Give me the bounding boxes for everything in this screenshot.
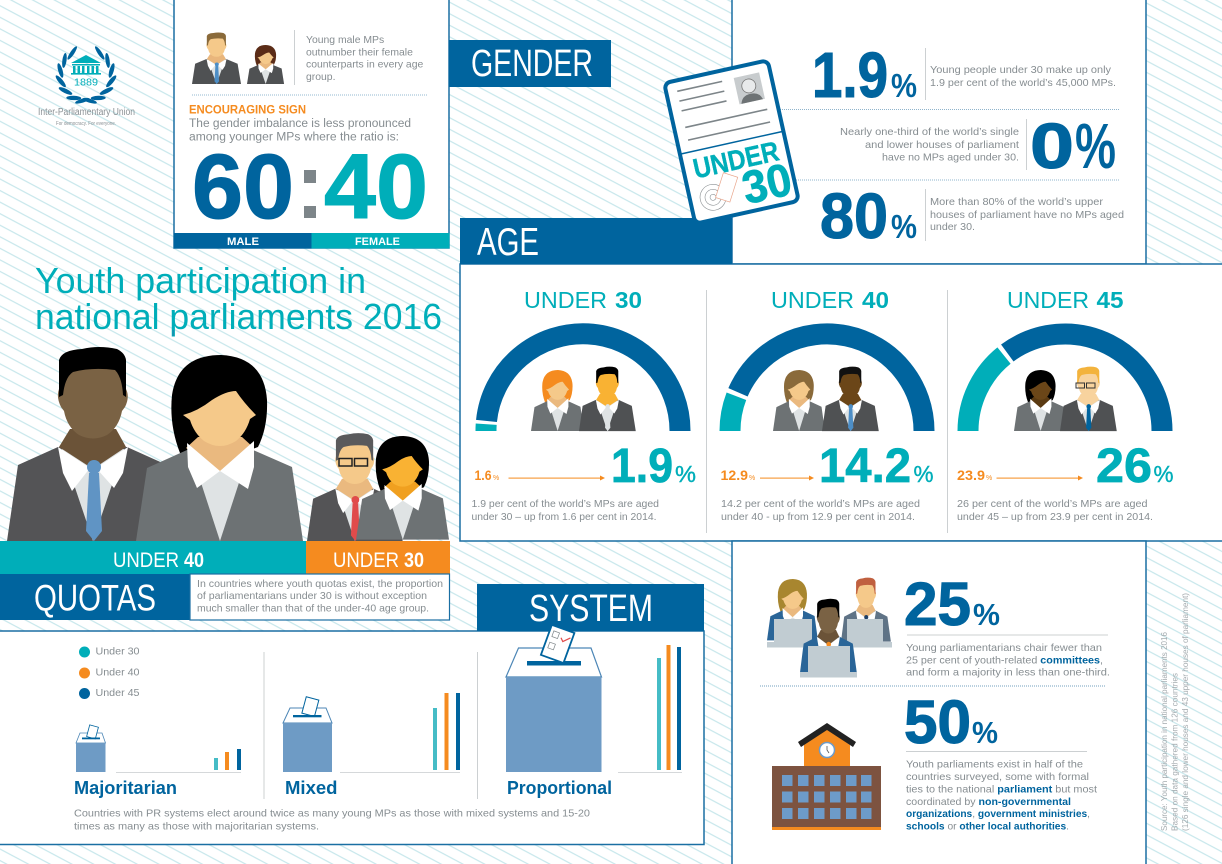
logo: Inter-Parliamentary Union (38, 45, 135, 127)
ratio 60:40: 40 (324, 136, 428, 238)
ratio 60:40 (192, 136, 428, 238)
column: under 45: % (1154, 461, 1174, 487)
stat: 50 per cent: 50 (904, 688, 971, 756)
column: under 45: % (986, 475, 992, 482)
stat: 0 per cent: and lower houses of parliament (865, 140, 1019, 151)
label bar: under 40: UNDER (113, 549, 179, 572)
text: gender imbalance (189, 118, 411, 144)
bars (433, 693, 460, 770)
column: under 30 (472, 287, 696, 523)
text: quotas: of parliamentarians under 30 is without exception (197, 591, 427, 602)
column: under 45 (957, 287, 1174, 523)
stat: 25 per cent: 25 (904, 570, 971, 638)
stat: 50 per cent: ties to the national parliament but most (906, 784, 1097, 796)
illustration: under 30 man and woman (307, 433, 449, 541)
stat: 50 per cent: coordinated by non-governmental (906, 797, 1071, 808)
column: under 45: 26 (1096, 440, 1152, 493)
column: under 45: 45 (1096, 287, 1124, 313)
stat: 0 per cent: have no MPs aged under 30. (882, 152, 1019, 164)
column: proportional: Proportional (507, 778, 612, 798)
icon: laurel wreath (54, 45, 118, 105)
stat: 1.9 per cent: % (891, 67, 917, 104)
legend: Under 45 (96, 688, 140, 699)
column: under 30: 1.9 (611, 440, 673, 493)
icon: ID photo (734, 72, 765, 104)
column: under 40: % (914, 461, 934, 487)
heading tab: age (460, 218, 732, 264)
icon: under 30 identity card (664, 60, 799, 226)
panel: under 30 statistics (732, 0, 1146, 264)
logo: Inter-Parliamentary Union: 1889 (74, 76, 98, 88)
title: Youth participation in (35, 260, 366, 301)
logo: Inter-Parliamentary Union: Inter-Parliamentary Union (38, 107, 135, 118)
stat: 80 per cent: % (891, 208, 917, 245)
heading tab: quotas: QUOTAS (34, 578, 156, 618)
stat: 50 per cent: countries surveyed, some with formal (906, 772, 1089, 783)
stat: 25 per cent: and form a majority in less than one-third. (906, 668, 1110, 678)
column: under 30: % (493, 475, 499, 482)
arrow (760, 476, 814, 480)
stat: 80 per cent: houses of parliament have no MPs aged (930, 210, 1124, 221)
text: quotas: In countries where youth quotas exist, the proportion (197, 579, 443, 590)
column: under 30: UNDER (524, 287, 607, 313)
column: under 40: under 40 - up from 12.9 per cent in 2014. (721, 512, 915, 523)
title: national parliaments 2016 (35, 296, 442, 337)
text: source note: Source: Youth participation in national parliaments 2016 (1160, 631, 1169, 831)
column: under 40: 14.2 per cent of the world’s MPs are aged (721, 499, 920, 510)
text: source note: Based on data gathered from 126 countries (1170, 673, 1180, 831)
panel: age (460, 264, 1222, 541)
label bar: under 30: UNDER (333, 549, 399, 572)
text: system note: Countries with PR systems elect around twice as many young MPs as those with mixed systems and 15-20 (74, 809, 590, 820)
column: majoritarian: Majoritarian (74, 778, 177, 798)
text: system note (74, 809, 590, 832)
stat: 25 per cent: 25 per cent of youth-related committees, (906, 656, 1103, 666)
bar: male (174, 233, 312, 248)
gauge: under 45 (968, 334, 1162, 431)
text: source note (1160, 593, 1190, 831)
stat: 50 per cent: organizations, government ministries, (906, 809, 1090, 820)
stat: 0 per cent: Nearly one-third of the world’s single (840, 127, 1019, 138)
column: under 30: 1.9 per cent of the world’s MPs are aged (472, 499, 659, 510)
icon: large ballot box (506, 648, 602, 772)
stat: 50 per cent (904, 688, 1097, 832)
stat: 1.9 per cent: 1.9 (812, 39, 888, 111)
bars (214, 749, 241, 770)
bar: female: FEMALE (355, 236, 400, 248)
gauge: under 30 (486, 334, 680, 431)
illustration: under 40 man and woman (7, 347, 303, 541)
column: proportional (506, 645, 682, 798)
ratio 60:40: 60 (192, 136, 294, 238)
stat: 0 per cent (840, 110, 1116, 182)
icon: glasses (339, 458, 368, 466)
text: quotas: much smaller than that of the under-40 age group. (197, 604, 429, 614)
column: under 30: 1.6 (474, 467, 492, 483)
arrow (508, 476, 605, 480)
stat: 80 per cent: under 30. (930, 222, 975, 233)
legend: Under 30 (96, 646, 140, 658)
icon: parliament building (71, 55, 101, 75)
stat: 25 per cent: % (973, 597, 1000, 632)
stat: 50 per cent: Youth parliaments exist in half of the (906, 760, 1083, 770)
heading tab: system (477, 584, 704, 631)
column: under 40: % (749, 475, 755, 482)
icon: ballot paper over tab (541, 625, 574, 663)
panel: committees and youth parliaments (732, 541, 1146, 864)
bar: female (312, 233, 450, 248)
column: under 40: 14.2 (819, 440, 911, 493)
arrow (996, 476, 1083, 480)
text: young male MPs: counterparts in every age (306, 60, 423, 70)
column: under 40: 12.9 (720, 467, 748, 483)
label bar: under 40 (0, 541, 306, 574)
heading tab: gender (449, 40, 611, 87)
panel: gender findings (174, 0, 450, 248)
legend: Under 40 (96, 668, 140, 678)
stat: 25 per cent: Young parliamentarians chair fewer than (906, 643, 1102, 654)
icon: glasses (1076, 383, 1095, 388)
stat: 0 per cent: 0 (1030, 110, 1074, 182)
icon: young man and woman MPs (192, 33, 284, 84)
icon: committee members (767, 578, 892, 678)
column: under 45: UNDER (1007, 287, 1089, 313)
heading tab: system: SYSTEM (529, 588, 653, 630)
label bar: under 40: 40 (184, 549, 204, 572)
column: under 40 (720, 287, 934, 523)
column: under 45: 26 per cent of the world’s MPs are aged (957, 499, 1148, 510)
stat: 80 per cent (820, 180, 1124, 252)
icon: under 30 identity card: 30 (737, 153, 796, 214)
stat: 80 per cent: 80 (820, 180, 888, 252)
stat: 1.9 per cent: 1.9 per cent of the world’s 45,000 MPs. (930, 78, 1116, 89)
column: under 30: under 30 – up from 1.6 per cent in 2014. (472, 512, 656, 523)
text: gender imbalance: among younger MPs where the ratio is: (189, 132, 399, 144)
heading: encouraging sign: ENCOURAGING SIGN (189, 102, 306, 116)
text: system note: times as many as those with majoritarian systems. (74, 822, 319, 832)
column: majoritarian (74, 725, 241, 798)
column: under 45: 23.9 (957, 467, 985, 483)
icon: medium ballot box (283, 697, 332, 772)
column: under 45: under 45 – up from 23.9 per cent in 2014. (957, 512, 1153, 523)
column: under 30: 30 (615, 287, 642, 313)
icon: stamp (696, 170, 744, 213)
stat: 25 per cent (904, 570, 1110, 678)
icon: under 30 identity card: UNDER (690, 135, 782, 185)
legend (79, 646, 140, 699)
heading tab: age: AGE (477, 221, 539, 264)
text: quotas (190, 574, 450, 620)
column: under 40: 40 (862, 287, 889, 313)
heading tab: gender: GENDER (471, 43, 593, 85)
panel: system (0, 631, 704, 844)
stat: 0 per cent: % (1075, 110, 1116, 182)
icon: youth parliament building (772, 723, 881, 830)
text: source note: (126 single and lower houses and 43 upper houses of parliament) (1181, 593, 1190, 831)
bar: male: MALE (227, 236, 259, 248)
icon: woman and man under 45 (1014, 367, 1117, 431)
stat: 80 per cent: More than 80% of the world’s upper (930, 197, 1104, 208)
column: mixed (283, 693, 460, 798)
icon: woman and man under 40 (773, 367, 879, 431)
stat: 1.9 per cent (812, 39, 1116, 111)
stat: 1.9 per cent: Young people under 30 make up only (930, 65, 1112, 76)
stat: 50 per cent: % (972, 715, 998, 750)
gauge: under 40 (730, 334, 924, 431)
text: gender imbalance: The gender imbalance is less pronounced (189, 118, 411, 130)
column: under 40: UNDER (771, 287, 854, 313)
label bar: under 30 (306, 541, 450, 574)
column: mixed: Mixed (285, 778, 338, 798)
text: young male MPs: group. (306, 72, 335, 83)
stat: 50 per cent: schools or other local authorities. (906, 822, 1069, 832)
text: young male MPs: outnumber their female (306, 47, 413, 58)
bars (657, 645, 681, 770)
title (35, 260, 442, 337)
icon: small ballot box (76, 725, 106, 772)
text: young male MPs: Young male MPs (306, 35, 384, 46)
label bar: under 30: 30 (404, 549, 424, 572)
icon: woman and man under 30 (531, 367, 636, 431)
logo: Inter-Parliamentary Union: For democracy. For everyone. (56, 121, 116, 127)
column: under 30: % (675, 461, 696, 487)
